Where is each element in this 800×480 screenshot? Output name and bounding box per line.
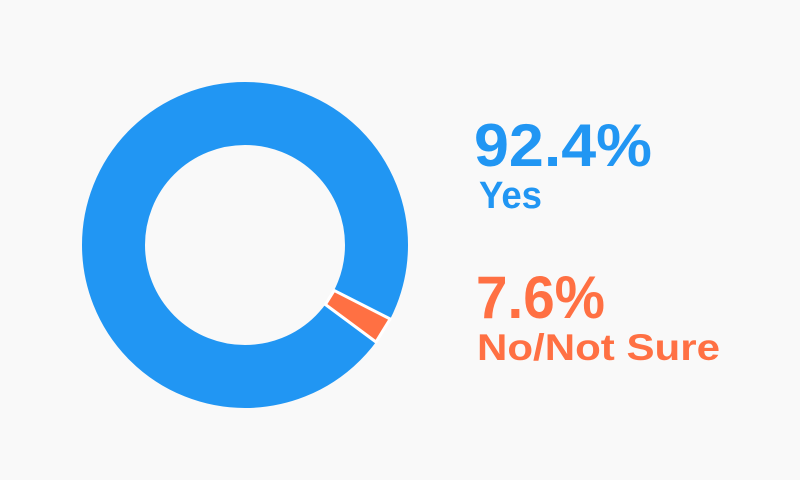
legend: no/not sure [476,264,720,368]
legend: yes [474,112,652,217]
label: No/Not Sure: No/Not Sure [477,327,720,368]
value: 92.4%: 92.4% [474,112,652,179]
donut chart [114,114,390,376]
segment: no/not sure 7.6% [325,290,390,342]
segment: yes 92.4% [114,114,376,376]
label: Yes: Yes [479,175,542,217]
value: 7.6%: 7.6% [476,264,605,331]
